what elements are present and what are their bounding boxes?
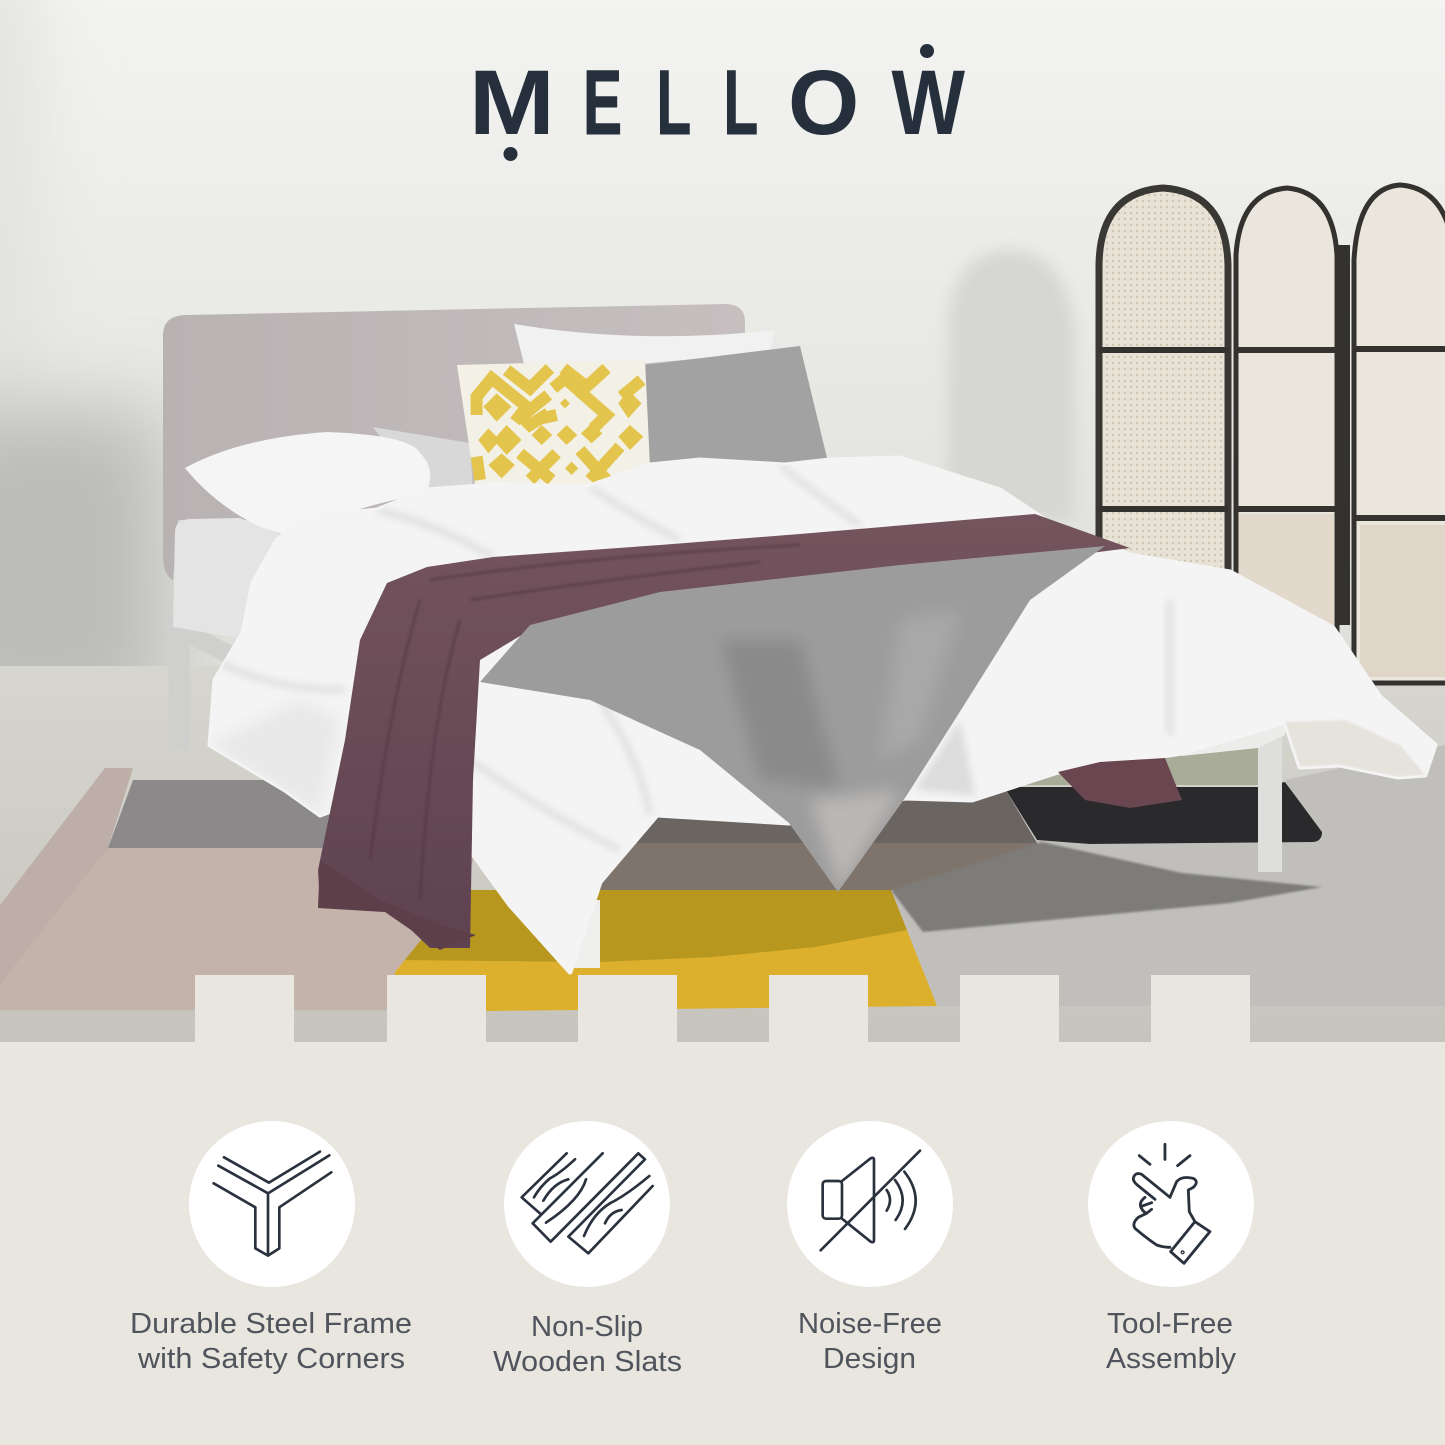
logo: MELLOW: W — [892, 52, 966, 154]
bed frame — [168, 612, 1285, 968]
throw far end — [1058, 758, 1182, 808]
floor — [0, 666, 1445, 1042]
rug mid dark — [620, 787, 1037, 843]
label: wooden slats: Wooden Slats — [493, 1346, 682, 1378]
mattress — [173, 518, 290, 640]
rug dark patch — [1004, 782, 1322, 844]
screen panel middle — [1236, 188, 1337, 640]
comforter torn corner — [1285, 720, 1425, 777]
icon: wooden planks — [504, 1121, 670, 1287]
label: tool free: Assembly — [1106, 1343, 1237, 1375]
wall shading left — [0, 0, 165, 720]
logo: MELLOW: M — [469, 52, 555, 154]
pillow grey — [645, 346, 828, 470]
comforter shading — [215, 465, 1170, 850]
feature: wooden slats — [493, 1121, 682, 1378]
icon: finger snap — [1088, 1121, 1254, 1287]
screen panel left — [1099, 188, 1228, 600]
headboard — [163, 304, 745, 580]
left leg — [168, 612, 240, 750]
screen shadow on wall — [948, 250, 1075, 520]
pillow yellow — [457, 360, 650, 484]
feature: tool free — [1088, 1121, 1254, 1375]
floor patch behind bed — [1004, 745, 1258, 785]
pillow side back — [373, 427, 473, 490]
label: tool free — [1106, 1308, 1237, 1375]
throw fringe — [318, 860, 476, 950]
label: steel frame — [130, 1308, 412, 1375]
icon: steel corner — [189, 1121, 355, 1287]
front leg — [572, 900, 600, 968]
icon: muted speaker — [787, 1121, 953, 1287]
photo: bedroom scene — [0, 0, 1445, 1042]
rug base right grey — [891, 745, 1445, 1006]
label: wooden slats — [493, 1311, 682, 1378]
pillow white left — [185, 432, 430, 535]
grey sheet — [480, 546, 1105, 892]
rug mid brown — [590, 843, 1064, 890]
rail — [1170, 715, 1285, 756]
bottom panel — [0, 975, 1445, 1445]
label: steel frame: with Safety Corners — [137, 1343, 405, 1375]
label: noise free — [798, 1308, 942, 1375]
comforter — [210, 458, 1435, 972]
feature: steel frame — [130, 1121, 412, 1375]
screen panel right — [1354, 185, 1445, 683]
screen hinge — [1338, 245, 1350, 625]
logo: MELLOW: E — [583, 52, 622, 154]
wall — [0, 0, 1445, 668]
feature: noise free — [787, 1121, 953, 1375]
logo: MELLOW: L — [724, 52, 758, 154]
rug yellow — [390, 885, 950, 1015]
logo: MELLOW — [469, 44, 966, 161]
label: noise free: Design — [823, 1343, 916, 1375]
label: noise free: Noise-Free — [798, 1308, 942, 1340]
throw plum — [318, 514, 1182, 950]
logo: MELLOW: O — [788, 52, 859, 154]
right leg — [1258, 735, 1282, 872]
label: wooden slats: Non-Slip — [531, 1311, 643, 1343]
rug band left — [0, 768, 133, 985]
folding screen — [1099, 185, 1445, 683]
rug band grey — [108, 780, 340, 848]
label: tool free: Tool-Free — [1107, 1308, 1233, 1340]
logo: MELLOW: L — [656, 52, 691, 154]
pillow back white — [514, 324, 775, 368]
rug — [0, 745, 1445, 1015]
rug shadow — [891, 842, 1322, 932]
rug pink — [0, 848, 480, 1010]
label: steel frame: Durable Steel Frame — [130, 1308, 412, 1340]
throw folds — [370, 545, 800, 900]
